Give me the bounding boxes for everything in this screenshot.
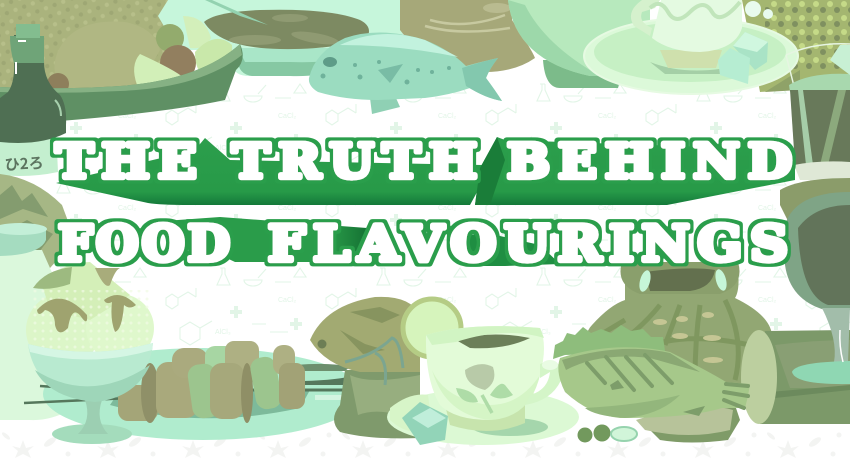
title line 2: FOOD [58, 214, 230, 272]
illustration: soy sauce bottle [0, 24, 66, 176]
title line 1: THE [56, 133, 197, 189]
title extrusion: line 1 [56, 137, 795, 205]
illustration: tea cup, saucer and sugar cubes [584, 0, 798, 94]
illustration: tea saucer [387, 389, 579, 445]
title extrusion: line 2 [150, 217, 560, 266]
illustration: wine glass [780, 178, 850, 384]
illustration: green bowl [508, 0, 650, 88]
illustration: dried fish [309, 32, 502, 114]
illustration: spotted green loaf [742, 0, 850, 92]
illustration: kebab plate [24, 348, 363, 440]
illustration: glass of dark drink [786, 44, 850, 180]
title [56, 133, 792, 272]
illustration: sugar cubes on saucer [390, 395, 448, 445]
illustration: log with cut end [741, 330, 850, 424]
illustration: muffin [310, 297, 420, 438]
title line 1 [56, 133, 792, 189]
illustration: green serving dish [0, 44, 243, 121]
illustration: lemon slice [403, 299, 461, 357]
bottle label: ひ2ろ [4, 152, 44, 175]
kebab skewer [24, 386, 130, 403]
illustration: milk bottle [0, 223, 70, 420]
illustration: ice cream sundae [26, 262, 154, 444]
illustration: potatoes and apple wedges in dish [134, 16, 232, 86]
title line 1: BEHIND [507, 133, 792, 189]
illustration: roast chicken [0, 0, 168, 88]
illustration: artichoke [0, 174, 75, 268]
illustration: sliced lotus and olives [578, 402, 740, 442]
title line 1: TRUTH [232, 133, 477, 189]
illustration: jar with woven cover [587, 262, 772, 390]
illustration: kebab pieces [118, 341, 355, 423]
title line 2: FLAVOURINGS [268, 214, 788, 272]
illustration: grilled fish with lettuce [553, 325, 750, 418]
illustration: brown round pie [400, 0, 535, 72]
illustration: plate with brown stew [150, 0, 403, 76]
illustration: tea cup with rose [426, 326, 563, 420]
